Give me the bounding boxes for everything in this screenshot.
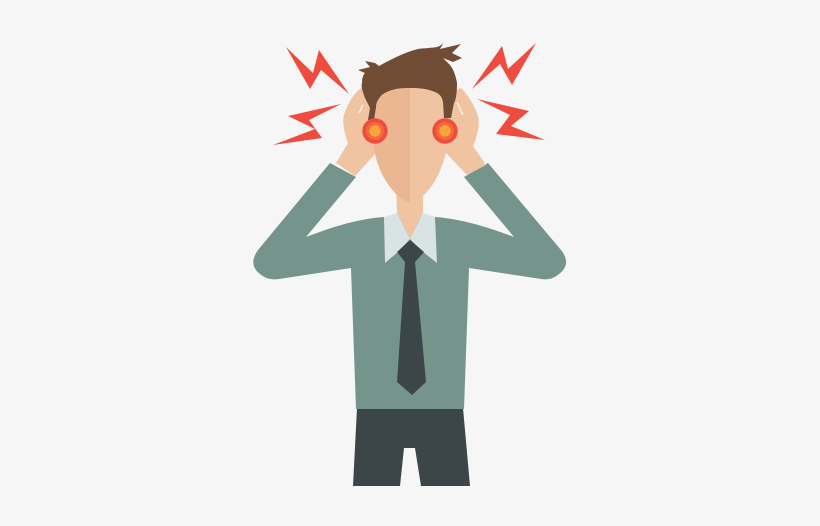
neck <box>396 185 423 239</box>
finger highlight right <box>457 102 463 115</box>
hair <box>358 42 462 120</box>
pain spot right <box>432 118 458 144</box>
shirt with arms <box>253 163 566 409</box>
collar <box>384 213 437 263</box>
collar right <box>410 213 437 263</box>
tie <box>397 240 426 395</box>
finger highlight left <box>359 105 363 113</box>
lightning bolt bottom left <box>273 104 341 145</box>
lightning bolt top right <box>472 43 536 89</box>
right hand <box>446 88 486 175</box>
trousers <box>353 408 470 486</box>
pain spot left <box>362 118 388 144</box>
face <box>372 82 449 202</box>
face shadow <box>372 82 410 202</box>
left hand <box>336 88 376 176</box>
collar left <box>384 213 410 263</box>
lightning bolt bottom right <box>477 99 545 140</box>
lightning bolt top left <box>286 47 349 94</box>
